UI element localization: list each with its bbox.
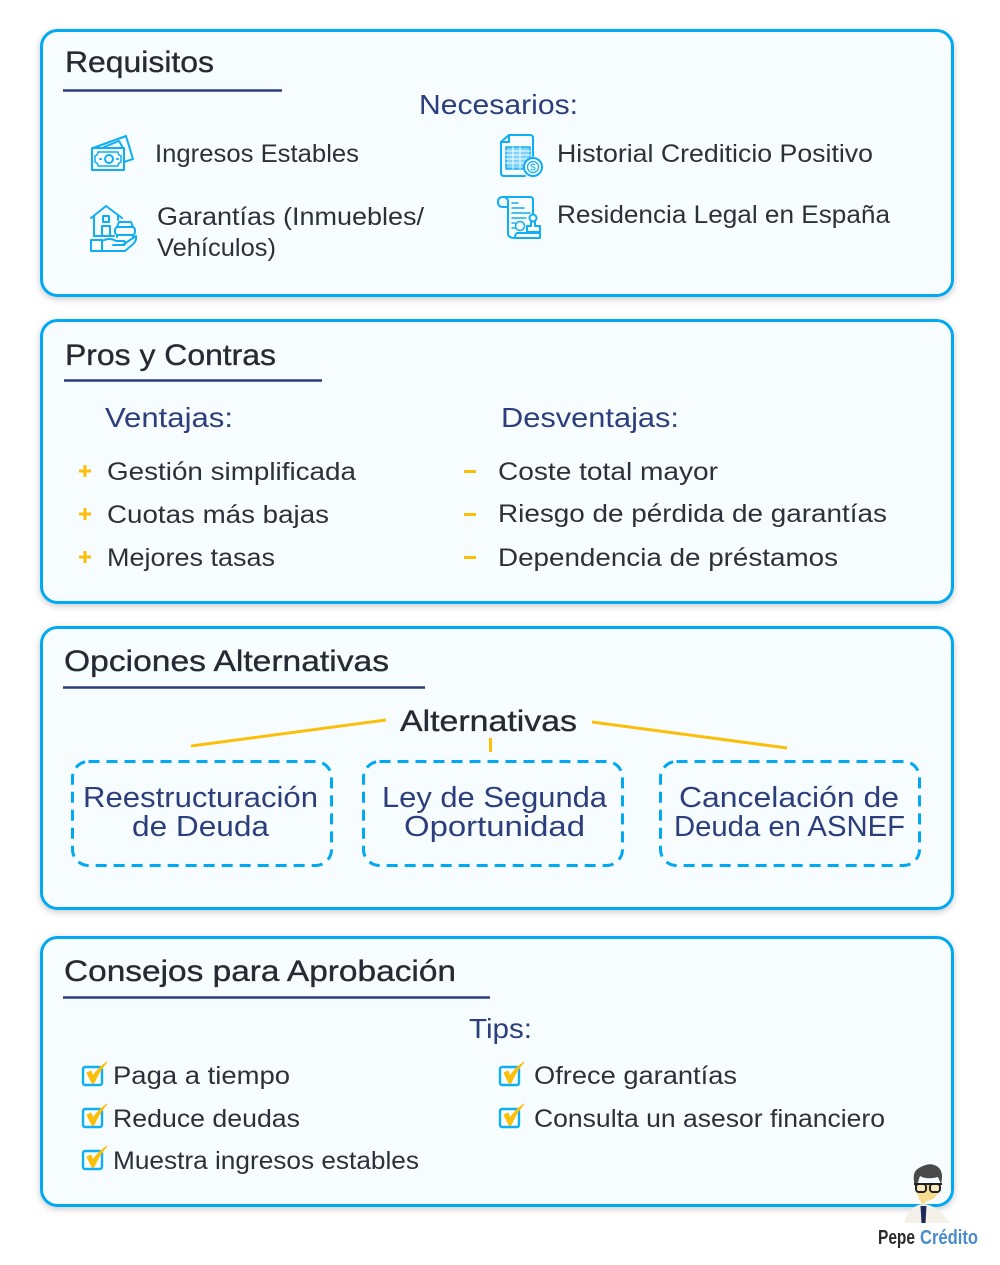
- heading: Alternativas: Alternativas: [400, 705, 577, 738]
- tip: Ofrece garantías: Ofrece garantías: [534, 1062, 737, 1090]
- icon: house, car and hand: [91, 206, 136, 251]
- tip: Consulta un asesor financiero: Consulta un asesor financiero: [534, 1105, 885, 1133]
- logo: Pepe Crédito: [878, 1164, 978, 1249]
- list: ventajas: Mejores tasas: [107, 544, 275, 572]
- mascot: [904, 1164, 950, 1223]
- option: Reestructuración de Deuda: Reestructuración: [83, 782, 318, 814]
- option: Reestructuración de Deuda: de Deuda: [132, 811, 270, 843]
- option: Cancelación de Deuda en ASNEF: Deuda en ASNEF: [674, 811, 905, 843]
- option: Ley de Segunda Oportunidad: Oportunidad: [404, 811, 585, 843]
- subheading: Desventajas: Desventajas:: [501, 402, 679, 433]
- tip: Reduce deudas: Reduce deudas: [113, 1105, 300, 1133]
- tip: Paga a tiempo: Paga a tiempo: [113, 1062, 290, 1090]
- option: Ley de Segunda Oportunidad: Ley de Segunda: [382, 782, 608, 814]
- panel: Consejos para Aprobación: [42, 938, 952, 1206]
- tip: Muestra ingresos estables: Muestra ingresos estables: [113, 1147, 419, 1175]
- icon: spreadsheet with coin: [501, 135, 542, 176]
- option: Cancelación de Deuda en ASNEF: [660, 762, 920, 866]
- heading: Opciones Alternativas: Opciones Alternativas: [64, 645, 389, 678]
- logo: Pepe Crédito: Crédito: [920, 1227, 978, 1249]
- text: Ingresos Estables: Ingresos Estables: [155, 140, 359, 168]
- heading: Requisitos: Requisitos: [65, 46, 214, 79]
- list: desventajas: Coste total mayor: [498, 458, 718, 486]
- icon: banknotes: [92, 136, 133, 170]
- option: Ley de Segunda Oportunidad: [364, 762, 622, 866]
- subheading: Necesarios: Necesarios:: [419, 89, 578, 120]
- text: Garantías: [157, 203, 424, 262]
- list: desventajas: [464, 458, 887, 572]
- list: desventajas: Riesgo de pérdida de garantías: [498, 500, 887, 528]
- logo: Pepe Crédito: Pepe: [878, 1227, 915, 1249]
- text: Residencia Legal en España: Residencia Legal en España: [557, 201, 890, 229]
- panel: Pros y Contras: [42, 320, 952, 602]
- list: ventajas: [79, 458, 356, 572]
- subheading: Tips: Tips:: [469, 1013, 532, 1044]
- panel: Requisitos: [42, 30, 952, 296]
- text: Garantías: Garantías (Inmuebles/: [157, 203, 424, 231]
- text: Historial Crediticio Positivo: Historial Crediticio Positivo: [557, 140, 873, 168]
- icon: legal scroll with stamp: [498, 197, 540, 238]
- list: desventajas: Dependencia de préstamos: [498, 544, 838, 572]
- list: ventajas: Cuotas más bajas: [107, 501, 329, 529]
- heading: Pros y Contras: Pros y Contras: [65, 339, 276, 372]
- heading: Consejos para Aprobación: Consejos para Aprobación: [64, 955, 456, 988]
- option: Reestructuración de Deuda: [72, 762, 332, 866]
- panel: Opciones Alternativas: [42, 628, 952, 908]
- subheading: Ventajas: Ventajas:: [105, 402, 233, 433]
- text: Garantías: Vehículos): [157, 234, 276, 262]
- list: ventajas: Gestión simplificada: [107, 458, 356, 486]
- option: Cancelación de Deuda en ASNEF: Cancelación de: [679, 782, 899, 814]
- connector lines: [191, 720, 787, 752]
